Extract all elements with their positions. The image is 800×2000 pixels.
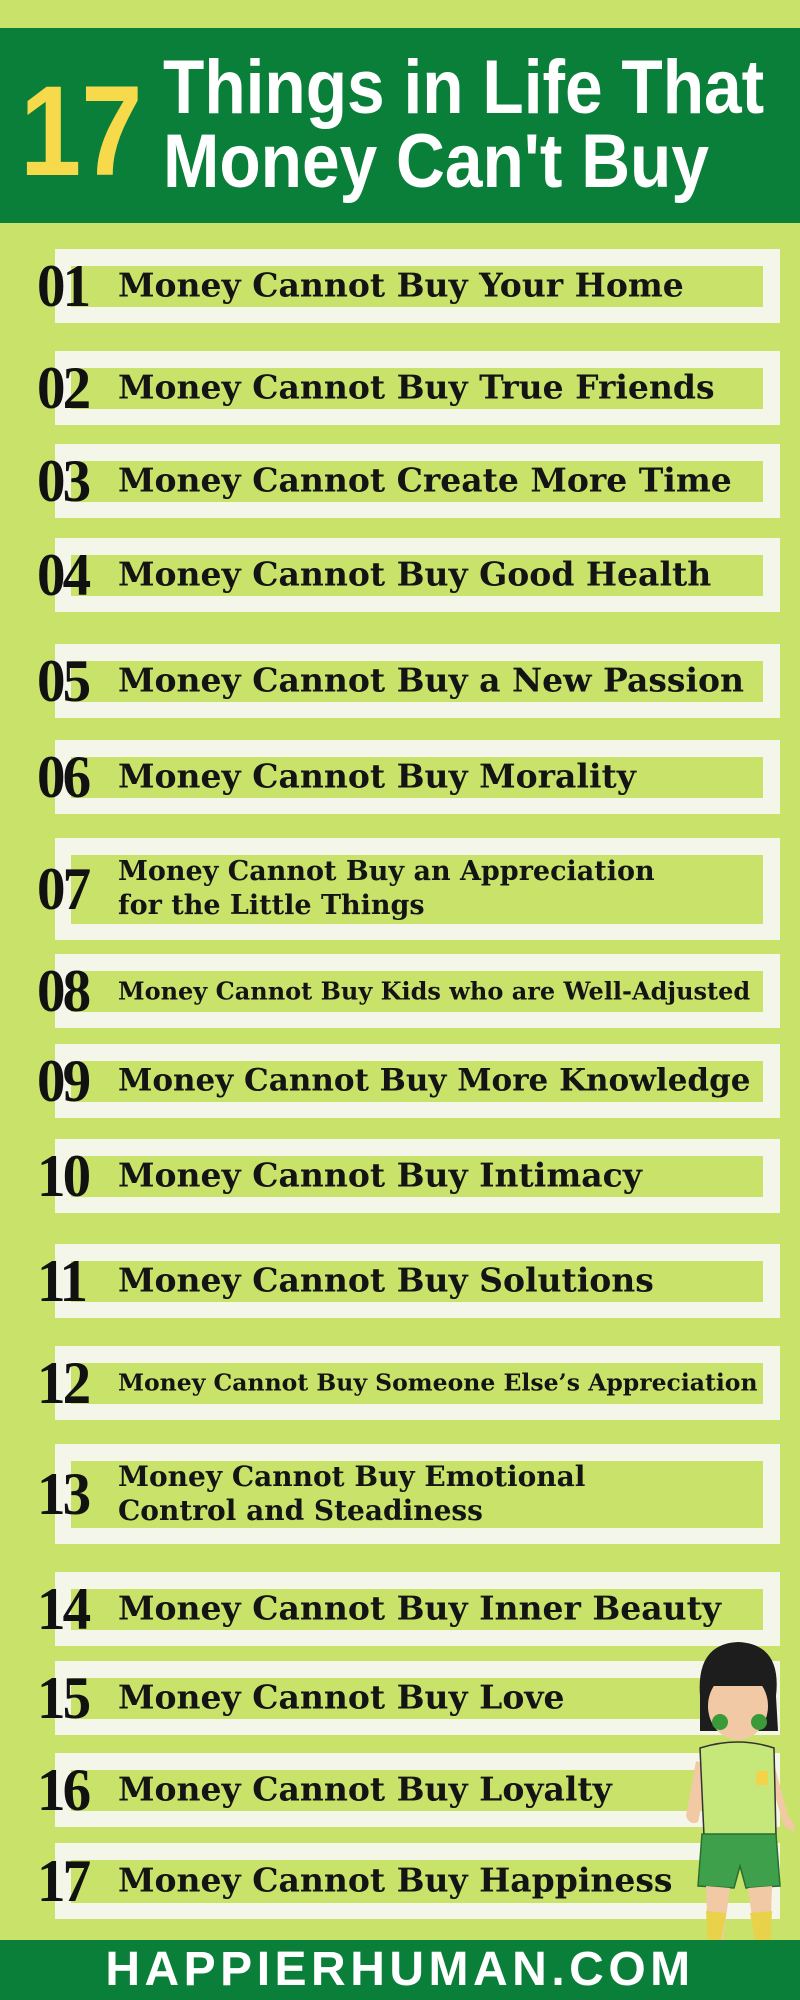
item 08: 08 — [37, 958, 88, 1024]
item 01: Money Cannot Buy Your Home — [118, 266, 684, 305]
header banner — [0, 28, 800, 223]
item 16: Money Cannot Buy Loyalty — [118, 1770, 612, 1809]
item 01 — [55, 249, 780, 323]
shirt — [700, 1742, 776, 1836]
item 17: Money Cannot Buy Happiness — [118, 1861, 673, 1900]
item 10: Money Cannot Buy Intimacy — [118, 1156, 642, 1195]
item 14: Money Cannot Buy Inner Beauty — [118, 1589, 721, 1628]
item 03: Money Cannot Create More Time — [118, 461, 732, 500]
item 02: Money Cannot Buy True Friends — [118, 368, 715, 407]
footer: HAPPIERHUMAN.COM — [105, 1943, 695, 1996]
item 15: 15 — [37, 1665, 88, 1731]
title line 2: Money Can't Buy — [163, 119, 709, 204]
item 11 — [55, 1244, 780, 1318]
legs — [706, 1886, 730, 1946]
illustration: girl — [686, 1642, 794, 1940]
item 07: Money Cannot Buy an Appreciation — [118, 856, 655, 887]
item 15: Money Cannot Buy Love — [118, 1678, 564, 1717]
item 12 — [55, 1346, 780, 1420]
item 04: 04 — [37, 542, 88, 608]
item 17: 17 — [37, 1848, 88, 1914]
item 07 — [55, 838, 780, 940]
face — [708, 1672, 768, 1740]
item 09 — [55, 1044, 780, 1118]
item 13: Control and Steadiness — [118, 1494, 483, 1527]
item 01: 01 — [37, 253, 88, 319]
item 07: for the Little Things — [118, 890, 425, 921]
item 16: 16 — [37, 1757, 88, 1823]
item 17 — [55, 1843, 780, 1919]
item 13: 13 — [37, 1461, 88, 1527]
item 07: 07 — [37, 856, 88, 922]
item 16 — [55, 1753, 780, 1827]
item 14: 14 — [37, 1576, 88, 1642]
item 13 — [55, 1444, 780, 1544]
item 04: Money Cannot Buy Good Health — [118, 555, 711, 594]
item 06 — [55, 740, 780, 814]
item 11: 11 — [37, 1248, 85, 1314]
item 05 — [55, 644, 780, 718]
item 06: Money Cannot Buy Morality — [118, 757, 636, 796]
item 10: 10 — [37, 1143, 88, 1209]
item 13: Money Cannot Buy Emotional — [118, 1460, 585, 1493]
item 09: Money Cannot Buy More Knowledge — [118, 1063, 750, 1099]
item 10 — [55, 1139, 780, 1213]
hair back — [700, 1642, 778, 1731]
item 08 — [55, 954, 780, 1028]
item 03 — [55, 444, 780, 518]
item 06: 06 — [37, 744, 88, 810]
item 05: 05 — [37, 648, 88, 714]
item 03: 03 — [37, 448, 88, 514]
footer — [0, 1940, 800, 2000]
item 15 — [55, 1661, 780, 1735]
item 12: Money Cannot Buy Someone Else’s Appreciation — [118, 1369, 758, 1397]
shorts — [698, 1834, 780, 1888]
item 02: 02 — [37, 355, 88, 421]
header number 17: 17 — [20, 60, 142, 203]
item 12: 12 — [37, 1350, 88, 1416]
arms — [686, 1761, 710, 1823]
item 04 — [55, 538, 780, 612]
item 11: Money Cannot Buy Solutions — [118, 1261, 654, 1300]
item 14 — [55, 1572, 780, 1646]
item 02 — [55, 351, 780, 425]
item 08: Money Cannot Buy Kids who are Well-Adjusted — [118, 976, 750, 1005]
item 09: 09 — [37, 1048, 88, 1114]
item 05: Money Cannot Buy a New Passion — [118, 661, 744, 700]
title line 1: Things in Life That — [163, 45, 764, 130]
